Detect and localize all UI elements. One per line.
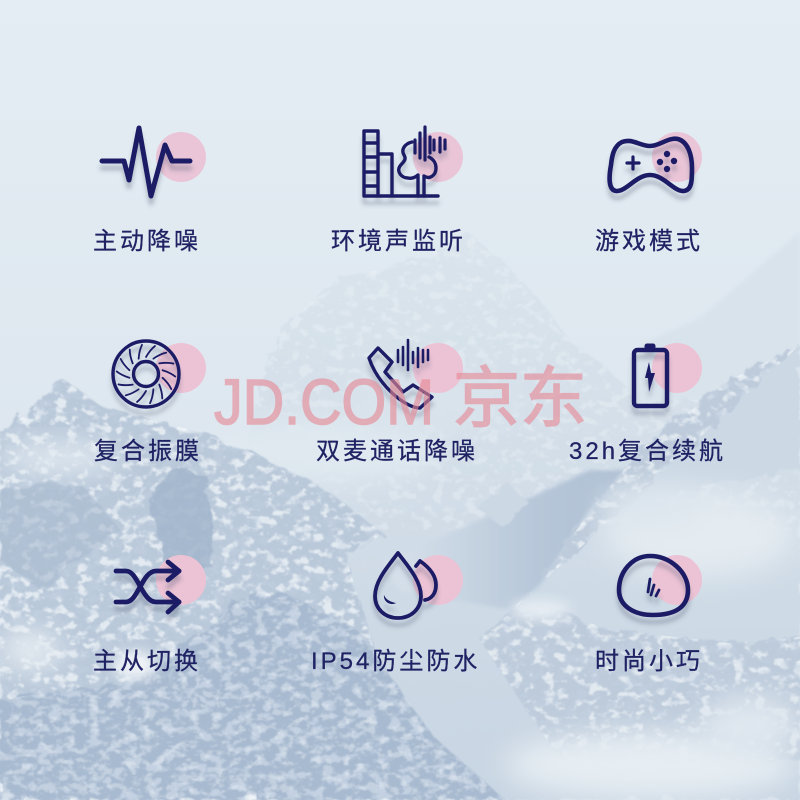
watermark: JD.COM: JD.COM — [214, 366, 434, 438]
label: ambient listening: 环境声监听 — [331, 228, 466, 255]
icon: dual-mic call — [369, 340, 463, 408]
icon: battery — [634, 343, 702, 406]
icon: active noise cancelling pulse — [102, 128, 206, 196]
background: misty mountains — [0, 232, 800, 800]
label: dual-mic call noise reduction: 双麦通话降噪 — [316, 438, 478, 465]
icon: shuffle master-slave switch — [116, 555, 206, 612]
watermark: JD.COM — [214, 361, 587, 438]
label: composite diaphragm: 复合振膜 — [94, 438, 202, 465]
label: 32h battery life: 32h复合续航 — [569, 438, 726, 465]
icon: composite diaphragm — [113, 341, 206, 407]
label: active noise cancelling: 主动降噪 — [93, 228, 201, 255]
icon: water drops — [375, 553, 463, 618]
label: stylish and compact: 时尚小巧 — [595, 648, 703, 675]
label: IP54 dust and water resistance: IP54防尘防水 — [311, 648, 480, 675]
icon: compact pebble — [619, 555, 702, 615]
watermark: JD.COM: 京东 — [453, 361, 587, 435]
icon: game controller — [610, 132, 702, 191]
icon: ambient listening — [364, 127, 463, 196]
label: master-slave switch: 主从切换 — [93, 648, 201, 675]
label: game mode: 游戏模式 — [595, 228, 703, 255]
